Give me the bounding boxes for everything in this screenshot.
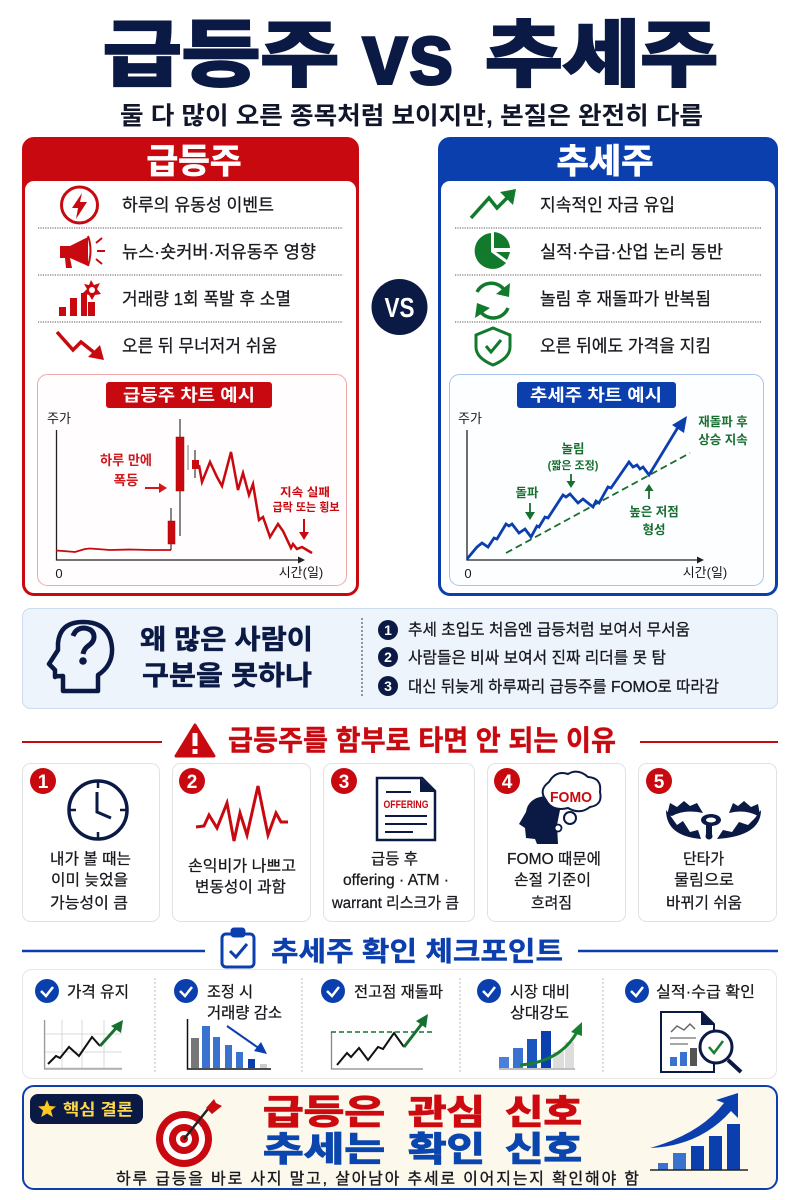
number 5: 5 [654, 772, 665, 793]
axes: 주가 [47, 411, 71, 426]
card text: warrant 리스크가 큼 [331, 894, 459, 912]
annotation: one-day surge [100, 453, 167, 493]
heading: trend checkpoints: 추세주 확인 체크포인트 [271, 937, 563, 967]
number 3 [331, 768, 357, 794]
title: 급등주 [103, 16, 339, 96]
card text: 손절 기준이 [514, 871, 591, 889]
mini chart [499, 1022, 582, 1069]
row text: collapse: 오른 뒤 무너저거 쉬움 [122, 336, 277, 356]
chart panel: 추세주 차트 예시 [450, 374, 764, 586]
card text: offering · ATM · [343, 872, 449, 889]
annotation: higher low [629, 484, 679, 537]
card text: 내가 볼 때는 [50, 850, 131, 868]
row text: fundamentals: 실적·수급·산업 논리 동반 [540, 242, 723, 262]
icon: offering document: OFFERING [384, 799, 428, 811]
heading: why: 왜 많은 사람이 [140, 625, 313, 655]
blue price line [467, 416, 687, 559]
heading: why not to chase surges [22, 725, 778, 756]
badge: 핵심 결론 [63, 1100, 133, 1119]
row text: repeated breakout: 놀림 후 재돌파가 반복됨 [540, 289, 711, 309]
axes: 시간(일) [279, 565, 323, 580]
checkpoint: volume decline [174, 979, 282, 1069]
chart panel: 급등주 차트 예시 [38, 374, 346, 586]
checkpoint: price hold: 가격 유지 [67, 983, 129, 1001]
icon: head with question mark [49, 622, 112, 691]
card text: 손익비가 나쁘고 [188, 857, 296, 875]
checkpoint: relative strength: 상대강도 [510, 1004, 569, 1022]
icon: down arrow [57, 332, 104, 360]
conclusion headline: 신호 [505, 1131, 582, 1169]
heading: why not to chase surges: 급등주를 함부로 타면 안 되는 이유 [228, 725, 616, 756]
row text: inflow: 지속적인 자금 유입 [540, 195, 675, 215]
icon: pulse line [196, 786, 288, 841]
list item 1: 1 [384, 622, 392, 638]
annotation: failure to sustain: 지속 실패 [280, 485, 330, 499]
card 4: FOMO [488, 764, 626, 922]
icon: shield check [476, 328, 510, 365]
card text: 급등 후 [371, 850, 418, 868]
panel: 급등주 [23, 138, 358, 595]
panel: key conclusion [23, 1086, 777, 1189]
icon: target [156, 1099, 222, 1167]
badge [30, 1094, 143, 1124]
conclusion headline: 관심 [408, 1094, 485, 1132]
list item 2: 사람들은 비싸 보여서 진짜 리더를 못 탐 [408, 649, 666, 667]
card text: 흐려짐 [531, 894, 572, 912]
trend support line [506, 453, 690, 553]
list item 3: 대신 뒤늦게 하루짜리 급등주를 FOMO로 따라감 [408, 678, 719, 696]
icon: warning [176, 725, 214, 756]
conclusion headline: 추세는 [263, 1131, 385, 1169]
card 3: offering risk [324, 764, 474, 922]
card text: 변동성이 과함 [195, 878, 286, 896]
annotation: failure to sustain [272, 485, 340, 540]
chart label [517, 382, 676, 408]
icon: lightning [62, 187, 98, 223]
chart label: 급등주 차트 예시 [123, 386, 255, 405]
checkpoint: retest breakout: 전고점 재돌파 [354, 983, 443, 1001]
chart label: 추세주 차트 예시 [530, 386, 662, 405]
card 5: trap [638, 764, 776, 922]
card text [331, 850, 459, 912]
number 5 [646, 768, 672, 794]
annotation: continued rise: 재돌파 후 [698, 414, 748, 429]
panel: why people can't tell [22, 608, 778, 708]
mini chart [331, 1014, 433, 1069]
card text: 단타가 [683, 850, 724, 868]
card text [666, 850, 742, 912]
checkpoint: volume decline: 거래량 감소 [207, 1004, 282, 1022]
icon: clock [69, 781, 127, 839]
icon: cycle arrows [475, 283, 510, 318]
conclusion headline: 확인 [408, 1131, 485, 1169]
axes: 0 [464, 566, 472, 581]
checkpoint: volume decline: 조정 시 [207, 983, 253, 1001]
icon: pie chart [475, 232, 510, 269]
red price line [56, 419, 312, 553]
annotation: higher low: 형성 [642, 522, 666, 537]
row text: liquidity event: 하루의 유동성 이벤트 [122, 195, 274, 215]
number 3: 3 [339, 772, 349, 793]
mini chart [44, 1020, 123, 1069]
icon: clipboard [222, 929, 254, 967]
number 4 [494, 768, 520, 794]
annotation: failure to sustain: 급락 또는 횡보 [272, 500, 340, 514]
card text: 바뀌기 쉬움 [666, 894, 742, 912]
checkpoint: price hold [35, 979, 129, 1069]
axes: 0 [55, 566, 63, 581]
axes: 주가 [458, 411, 482, 426]
checkpoint: fundamentals: 실적·수급 확인 [656, 983, 755, 1001]
VS badge [372, 279, 428, 335]
icon: megaphone [60, 236, 105, 268]
heading: trend checkpoints [22, 929, 778, 967]
card text: 가능성이 큼 [50, 894, 128, 912]
card text [50, 850, 131, 912]
number 2: 2 [187, 772, 197, 793]
checkpoint: fundamentals [625, 979, 755, 1072]
icon: volume burst [59, 280, 101, 316]
list item 3: 3 [384, 678, 392, 694]
annotation: breakout: 돌파 [515, 486, 539, 500]
conclusion headline: 급등은 [263, 1094, 385, 1132]
chart label [106, 382, 272, 408]
subtitle: 둘 다 많이 오른 종목처럼 보이지만, 본질은 완전히 다름 [120, 102, 703, 130]
icon: up arrow [471, 189, 516, 218]
annotation: breakout [515, 486, 539, 520]
number 2 [179, 768, 205, 794]
annotation: one-day surge: 하루 만에 [100, 453, 152, 468]
number 1: 1 [38, 772, 49, 793]
checkpoint: relative strength: 시장 대비 [510, 983, 570, 1001]
icon: FOMO head: FOMO [550, 789, 592, 806]
conclusion headline: 신호 [505, 1094, 582, 1132]
row text: holds price: 오른 뒤에도 가격을 지킴 [540, 336, 711, 356]
VS badge: VS [384, 292, 414, 323]
checkpoint: retest breakout [321, 979, 443, 1069]
list item 2: 2 [384, 649, 392, 665]
list item 1: 추세 초입도 처음엔 급등처럼 보여서 무서움 [408, 621, 690, 639]
title: vs [362, 4, 454, 103]
annotation: continued rise [698, 414, 748, 447]
card text: 물림으로 [674, 871, 734, 889]
axes [458, 411, 727, 581]
heading: 추세주: 추세주 [556, 143, 654, 181]
icon: document with magnifier [661, 1012, 741, 1072]
title: 추세주 [485, 16, 718, 96]
icon: FOMO head [519, 772, 601, 844]
annotation: one-day surge: 폭등 [114, 473, 138, 488]
annotation: pullback [548, 442, 599, 488]
card 1: too late [22, 764, 160, 922]
axes: 시간(일) [683, 565, 727, 580]
conclusion headline [263, 1094, 582, 1169]
panel: 추세주 [439, 138, 777, 595]
conclusion subtext: 하루 급등을 바로 사지 말고, 살아남아 추세로 이어지는지 확인해야 함 [116, 1170, 639, 1188]
card 2: bad risk reward [172, 764, 310, 922]
panel: checkpoints [22, 970, 776, 1078]
annotation: higher low: 높은 저점 [629, 504, 679, 519]
heading: why: 구분을 못하나 [142, 661, 312, 691]
icon: offering document [377, 778, 435, 840]
annotation: pullback: (짧은 조정) [548, 459, 599, 472]
heading: why [140, 625, 313, 691]
card text [507, 850, 601, 912]
row text: news: 뉴스·숏커버·저유동주 영향 [122, 242, 316, 262]
row text: volume: 거래량 1회 폭발 후 소멸 [122, 289, 291, 309]
card text: 이미 늦었을 [51, 871, 128, 889]
icon: growth chart [650, 1093, 748, 1170]
annotation: pullback: 놀림 [561, 442, 585, 456]
card text [188, 857, 296, 896]
heading: 급등주: 급등주 [146, 143, 242, 181]
mini chart [188, 1019, 271, 1069]
card text: FOMO 때문에 [507, 850, 601, 868]
axes [47, 411, 323, 581]
number 4: 4 [502, 772, 513, 793]
number 1 [30, 768, 56, 794]
checkpoint: relative strength [477, 979, 582, 1069]
icon: bear trap [666, 801, 761, 840]
title [103, 4, 718, 103]
annotation: continued rise: 상승 지속 [698, 433, 748, 447]
